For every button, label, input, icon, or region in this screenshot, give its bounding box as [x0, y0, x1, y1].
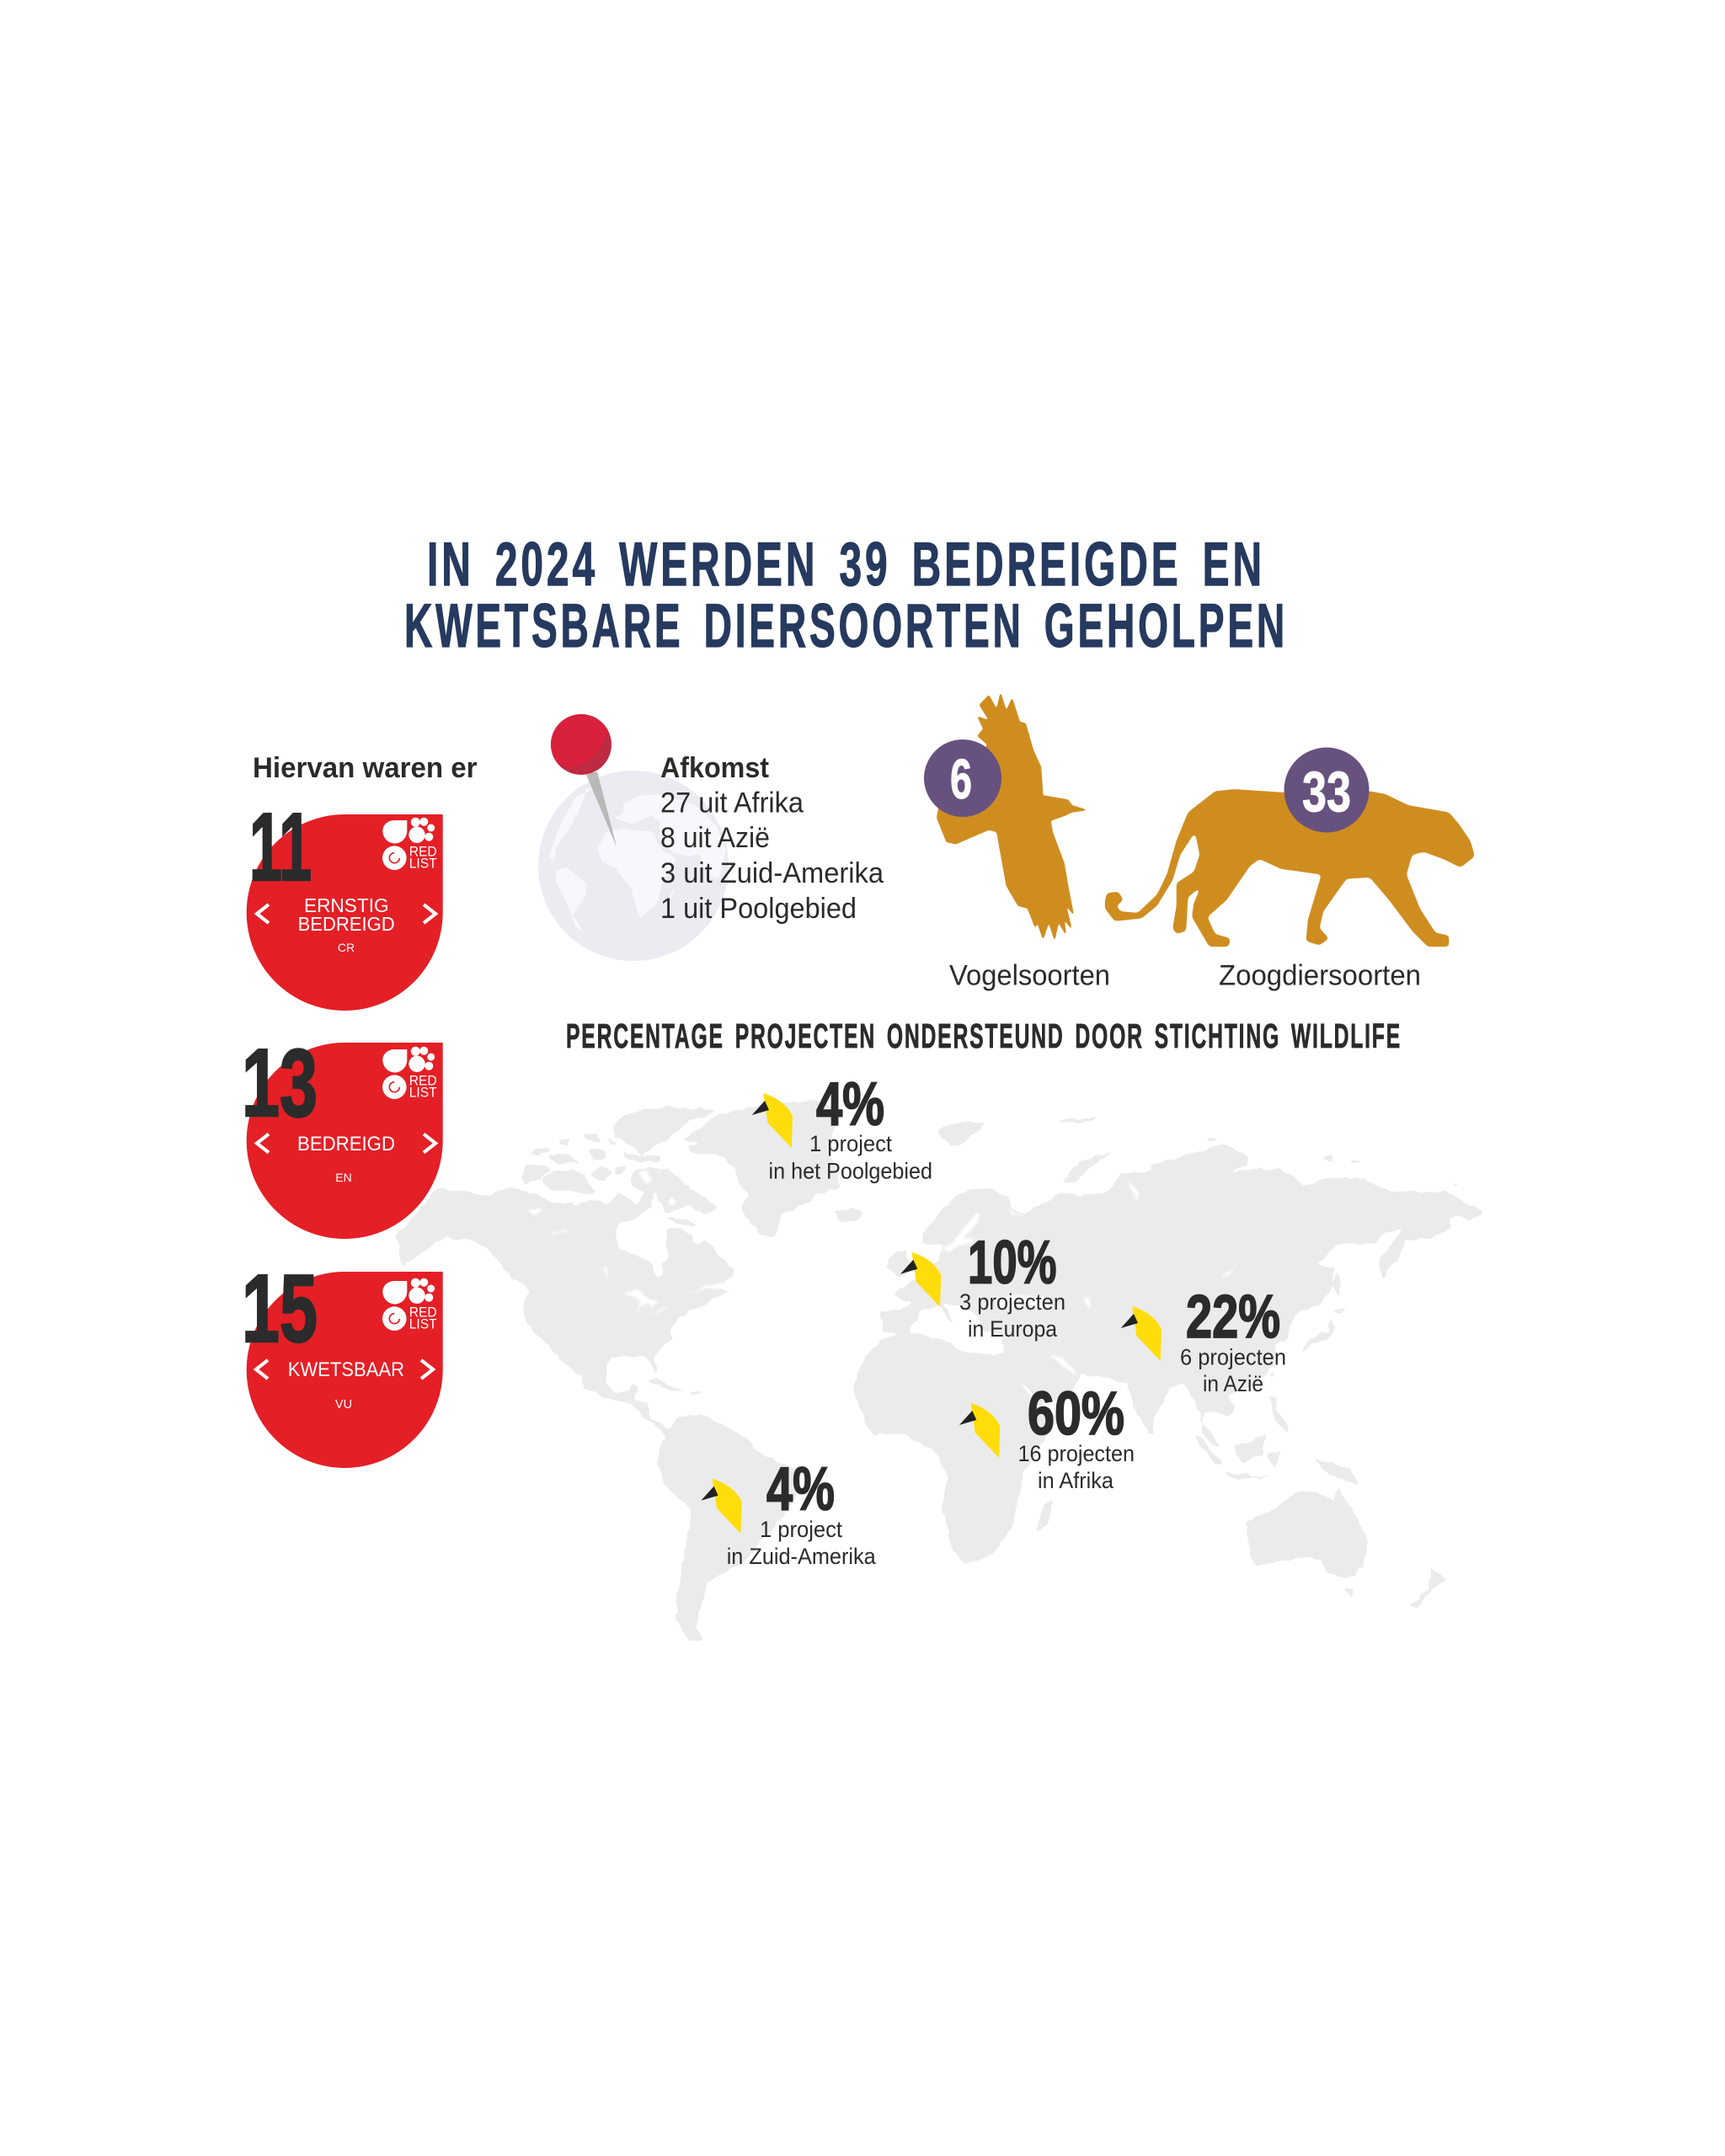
status label [288, 1358, 404, 1412]
badge shape [247, 1272, 443, 1468]
status label: KWETSBAAR [288, 1358, 404, 1381]
stat: poolgebied [768, 1071, 932, 1184]
stat: azie: 22% [1186, 1283, 1280, 1351]
panel: red list badge endangered [242, 1030, 443, 1239]
stat: poolgebied: in het Poolgebied [768, 1159, 932, 1184]
text block: afkomst: 3 uit Zuid-Amerika [660, 857, 884, 889]
status label: BEDREIGD [297, 1133, 395, 1155]
stat: europa: 3 projecten [959, 1289, 1065, 1315]
label: vogelsoorten: Vogelsoorten [949, 960, 1110, 992]
stat: zuid-amerika: 4% [766, 1456, 835, 1524]
status label: BEDREIGD [298, 913, 395, 935]
stat: europa: 10% [968, 1229, 1056, 1296]
text block: afkomst: Afkomst [660, 752, 769, 784]
text block: afkomst [660, 752, 884, 925]
number 13: 13 [242, 1030, 318, 1137]
icon: red list logo: LIST [409, 855, 437, 871]
heading: hiervan waren er: Hiervan waren er [253, 752, 477, 784]
stat: poolgebied: 4% [816, 1071, 884, 1139]
marker: afrika [959, 1403, 1000, 1458]
icon: red list logo [382, 1047, 437, 1100]
marker: europa [900, 1252, 941, 1307]
status label: ERNSTIG [304, 894, 389, 916]
stat: azie [1180, 1283, 1286, 1396]
badge: 6 bird species: 6 [950, 748, 972, 811]
world map [396, 1102, 1484, 1641]
icon: red list logo [382, 1278, 437, 1331]
status label [297, 1133, 395, 1184]
stat: zuid-amerika: in Zuid-Amerika [727, 1544, 877, 1569]
icon: red list logo [382, 818, 437, 871]
status label: CR [338, 941, 355, 954]
stat: poolgebied: 1 project [809, 1131, 892, 1156]
stat: afrika [1017, 1380, 1135, 1493]
icon: red list logo: RED [409, 1304, 437, 1320]
status label: EN [335, 1171, 352, 1184]
text block: afkomst: 27 uit Afrika [660, 787, 804, 819]
status label [298, 894, 395, 954]
icon: bird silhouette [937, 692, 1087, 941]
stat: afrika: in Afrika [1038, 1468, 1114, 1493]
stat: europa: in Europa [968, 1316, 1058, 1342]
badge: 33 mammal species [1284, 748, 1370, 832]
stat: afrika: 60% [1028, 1380, 1124, 1448]
title: IN 2024 WERDEN 39 BEDREIGDE EN [427, 531, 1265, 599]
panel: red list badge vulnerable [242, 1256, 443, 1468]
stat: azie: 6 projecten [1180, 1345, 1286, 1370]
panel: red list badge critically endangered [247, 794, 443, 1011]
icon: red list logo: RED [409, 1072, 437, 1088]
text block: afkomst: 1 uit Poolgebied [660, 893, 857, 925]
icon: globe with pin [538, 714, 729, 961]
stat: europa [959, 1229, 1065, 1342]
stat: zuid-amerika: 1 project [760, 1517, 842, 1542]
icon: red list logo: RED [409, 843, 437, 859]
badge: 6 bird species [924, 739, 1001, 817]
icon: chevrons [256, 1360, 433, 1379]
text block: afkomst: 8 uit Azië [660, 822, 770, 854]
number 11: 11 [249, 794, 312, 901]
marker: azie [1121, 1306, 1162, 1361]
icon: chevrons [257, 1134, 435, 1152]
stat: azie: in Azië [1203, 1371, 1263, 1396]
icon: big cat silhouette [1105, 789, 1475, 947]
marker: zuid-amerika [701, 1479, 742, 1534]
icon: chevrons [257, 905, 435, 923]
stat: afrika: 16 projecten [1017, 1441, 1135, 1466]
icon: red list logo: LIST [409, 1084, 437, 1100]
status label: VU [335, 1398, 352, 1412]
icon: red list logo: LIST [409, 1315, 437, 1331]
badge shape [247, 814, 443, 1011]
number 15: 15 [242, 1256, 318, 1363]
badge shape [247, 1043, 443, 1239]
title [404, 531, 1288, 660]
badge: 33 mammal species: 33 [1302, 760, 1351, 824]
stat: zuid-amerika [727, 1456, 877, 1569]
label: zoogdiersoorten: Zoogdiersoorten [1219, 960, 1421, 992]
marker: poolgebied [752, 1093, 793, 1148]
